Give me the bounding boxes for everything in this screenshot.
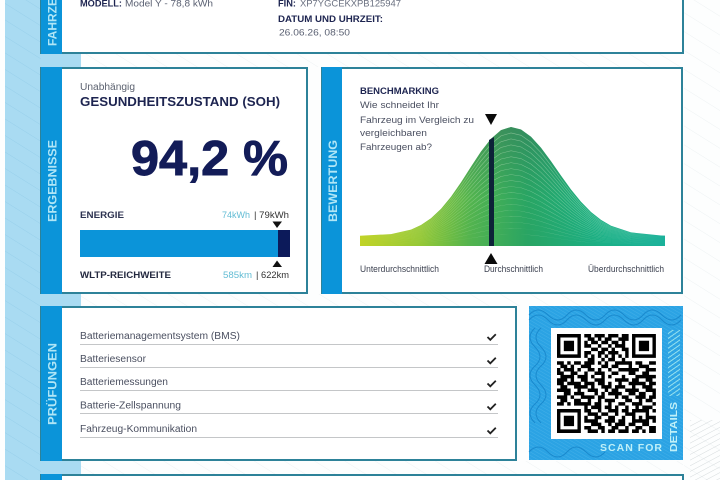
big SOH value: 94,2 %	[131, 132, 288, 186]
benchmarking question: Fahrzeugen ab?	[360, 142, 432, 153]
benchmarking heading: BENCHMARKING	[360, 86, 439, 97]
subheading: Unabhängig	[80, 82, 135, 93]
QR white background	[551, 328, 662, 439]
check row: BMS	[80, 331, 498, 344]
range label: WLTP-REICHWEITE	[80, 270, 171, 281]
benchmarking question: vergleichbaren	[360, 128, 427, 139]
vehicle model	[80, 0, 213, 10]
benchmarking question: Fahrzeug im Vergleich zu	[360, 115, 474, 126]
label: scan for: SCAN FOR	[600, 442, 662, 454]
date label: DATUM UND UHRZEIT:	[278, 14, 383, 25]
decorative hatch	[668, 330, 680, 396]
panel: bottom section	[41, 474, 683, 480]
tab label: rating: BEWERTUNG	[328, 140, 340, 222]
check row: measurements: Batteriemessungen	[80, 377, 168, 388]
tab label: results: ERGEBNISSE	[48, 140, 60, 222]
range values: | 622km	[256, 270, 289, 281]
panel: results	[41, 67, 307, 294]
QR code	[557, 336, 656, 431]
range values: 585km	[223, 270, 252, 281]
check row: cell voltage	[80, 400, 498, 414]
tab label: checks: PRÜFUNGEN	[46, 343, 60, 425]
benchmarking question	[360, 100, 474, 153]
energy label: ENERGIE	[80, 210, 124, 220]
benchmarking question: Wie schneidet Ihr	[360, 100, 439, 111]
check row: BMS: Batteriemanagementsystem (BMS)	[80, 331, 240, 342]
marker: range	[272, 260, 282, 267]
axis label: above average: Überdurchschnittlich	[588, 264, 664, 274]
panel: checks	[41, 306, 516, 461]
panel: benchmarking	[322, 67, 682, 294]
check row: cell voltage: Batterie-Zellspannung	[80, 400, 181, 412]
marker: top triangle	[485, 114, 497, 125]
date value: 26.06.26, 08:50	[279, 28, 350, 38]
axis label: below average: Unterdurchschnittlich	[360, 264, 439, 274]
check row: sensor: Batteriesensor	[80, 354, 147, 365]
energy values: 74kWh	[222, 210, 250, 221]
panel: QR code card	[529, 306, 683, 460]
marker: bottom triangle	[484, 253, 498, 264]
capacity bar	[80, 230, 290, 257]
check row: communication: Fahrzeug-Kommunikation	[80, 424, 197, 435]
energy values	[222, 210, 289, 221]
check row: communication	[80, 424, 498, 438]
label: details: DETAILS	[668, 402, 680, 452]
bell curve chart	[360, 127, 665, 246]
range values	[223, 270, 289, 281]
check row: sensor	[80, 354, 498, 368]
heading: state of health: GESUNDHEITSZUSTAND (SOH)	[80, 94, 280, 109]
axis label: average: Durchschnittlich	[484, 264, 543, 274]
energy values: | 79kWh	[254, 210, 289, 221]
left decorative strip	[5, 0, 81, 480]
check row: measurements	[80, 377, 498, 390]
marker: energy	[272, 222, 282, 228]
panel: vehicle data	[41, 0, 683, 54]
marker bar: vehicle position	[489, 137, 494, 246]
